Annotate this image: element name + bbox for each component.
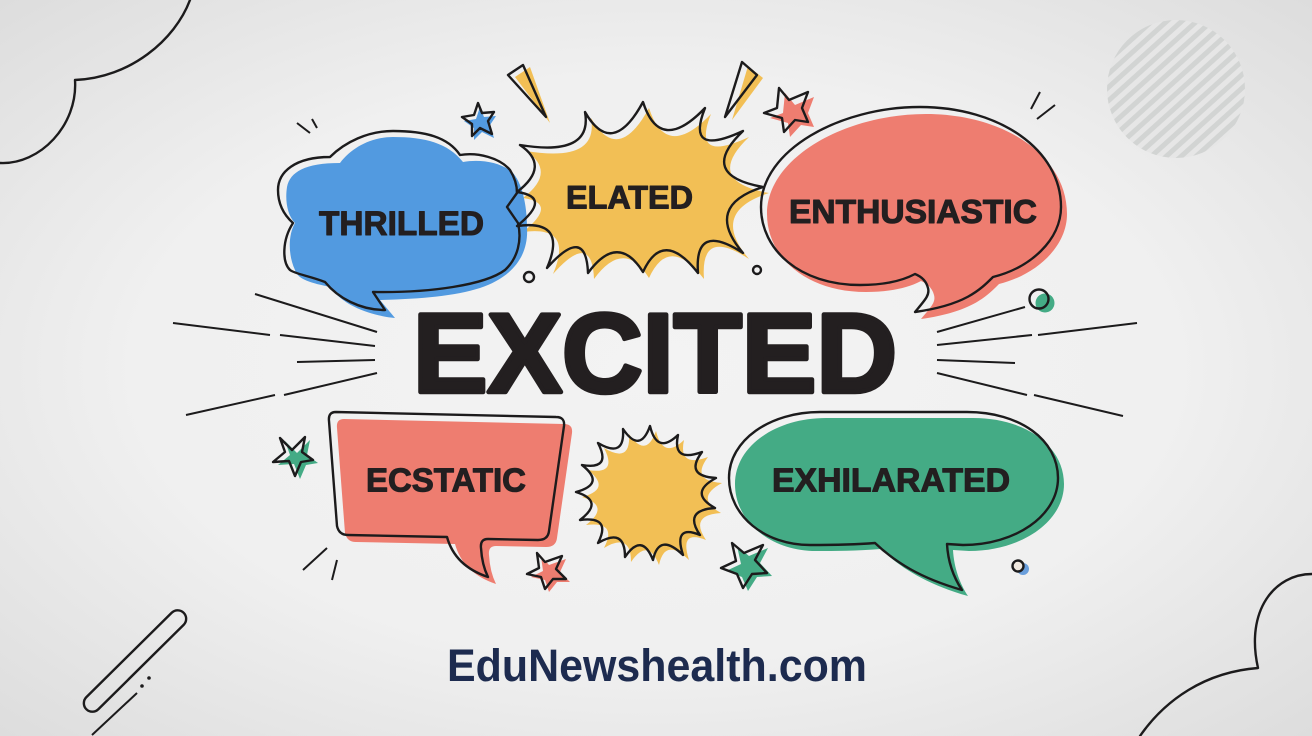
burst lines left <box>173 294 377 415</box>
tick marks enthusiastic <box>1031 92 1055 119</box>
cloud bubble: thrilled <box>278 131 527 318</box>
tick marks thrilled <box>297 119 317 133</box>
starburst: plain yellow <box>576 426 722 565</box>
label: enthusiastic: ENTHUSIASTIC <box>789 193 1037 230</box>
small ring left <box>524 272 534 282</box>
small ring right <box>753 266 761 274</box>
green dot <box>1030 290 1054 312</box>
speech bubble: enthusiastic <box>761 107 1067 319</box>
accent triangle left <box>508 65 550 123</box>
star: green left <box>273 437 318 479</box>
starburst outline and label: elated <box>517 102 763 273</box>
accent triangle right <box>725 62 763 120</box>
star: green bottom <box>721 543 772 591</box>
speech bubble: exhilarated <box>729 412 1064 596</box>
star: blue <box>462 103 496 140</box>
tick marks ecstatic <box>303 548 337 580</box>
star: pink top <box>764 88 814 137</box>
starburst fill: elated <box>523 108 769 279</box>
corner cloud outline bottom-right <box>1140 574 1312 736</box>
label: exhilarated: EXHILARATED <box>772 462 1010 498</box>
striped circle decoration <box>1107 20 1245 158</box>
label: ecstatic: ECSTATIC <box>366 462 526 498</box>
burst lines right <box>937 307 1137 416</box>
speech bubble: ecstatic <box>329 412 572 584</box>
blue dot <box>1012 560 1029 575</box>
label: elated: ELATED <box>566 180 693 216</box>
main title: EXCITED <box>413 291 897 416</box>
corner cloud outline top-left <box>0 0 190 163</box>
capsule and dots bottom-left <box>80 607 190 735</box>
label: thrilled: THRILLED <box>319 205 484 243</box>
star: pink bottom <box>527 553 570 592</box>
website footer: EduNewshealth.com <box>447 640 867 691</box>
